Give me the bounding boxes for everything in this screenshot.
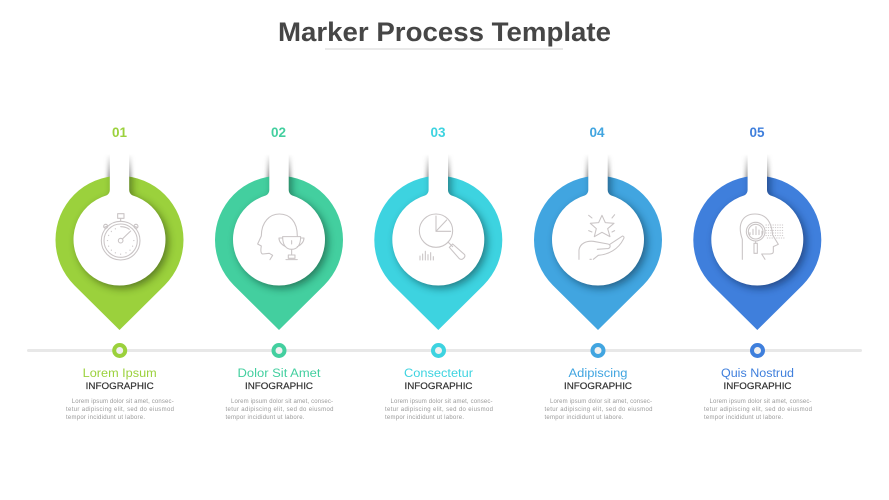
timeline dot 4 — [590, 343, 606, 358]
number 03: 03 — [430, 125, 446, 140]
step 1 — [55, 125, 183, 421]
timeline dot 1 — [112, 343, 127, 358]
description 1: Lorem ipsum dolor sit amet, consec- — [72, 399, 174, 405]
timeline dot 3 — [431, 343, 446, 358]
heading 4: Adipiscing — [568, 368, 628, 380]
marker pin 1 — [55, 150, 183, 330]
description 5: tetur adipiscing elit, sed do eiusmod — [704, 407, 812, 413]
subheading 5: INFOGRAPHIC — [724, 381, 792, 392]
marker pin 2 — [215, 150, 343, 330]
description 3: Lorem ipsum dolor sit amet, consec- — [390, 399, 492, 405]
description 3: tempor incididunt ut labore. — [385, 415, 464, 421]
timeline dot 2 — [272, 343, 286, 358]
description 5: Lorem ipsum dolor sit amet, consec- — [710, 399, 812, 405]
heading 3: Consectetur — [404, 368, 473, 380]
subheading 1: INFOGRAPHIC — [86, 381, 154, 392]
description 4: tetur adipiscing elit, sed do eiusmod — [544, 407, 652, 413]
marker pin 4 — [534, 150, 662, 330]
title: Marker Process Template — [278, 17, 611, 47]
description 2: tempor incididunt ut labore. — [226, 415, 305, 421]
heading 2: Dolor Sit Amet — [238, 368, 321, 380]
number 05: 05 — [749, 125, 765, 140]
number 04: 04 — [589, 125, 605, 140]
icon: stopwatch — [101, 214, 140, 260]
step 2 — [215, 125, 343, 421]
description 1: tempor incididunt ut labore. — [66, 415, 145, 421]
icon: head with trophy — [258, 214, 304, 260]
number 02: 02 — [271, 125, 286, 140]
description 3: tetur adipiscing elit, sed do eiusmod — [385, 407, 493, 413]
description 5: tempor incididunt ut labore. — [704, 415, 783, 421]
description 1: tetur adipiscing elit, sed do eiusmod — [66, 407, 174, 413]
description 4: Lorem ipsum dolor sit amet, consec- — [550, 399, 652, 405]
icon: head with magnifier and data — [740, 214, 784, 259]
marker pin 5 — [693, 150, 821, 330]
description 2: tetur adipiscing elit, sed do eiusmod — [226, 407, 334, 413]
icon: star in hand — [579, 215, 624, 259]
marker pin 3 — [374, 150, 502, 330]
subheading 4: INFOGRAPHIC — [564, 381, 632, 392]
icon: pie chart magnifier — [419, 214, 465, 260]
title underline — [325, 48, 563, 50]
step 3 — [374, 125, 502, 421]
subheading 2: INFOGRAPHIC — [245, 381, 313, 392]
timeline line — [27, 349, 862, 352]
description 4: tempor incididunt ut labore. — [544, 415, 624, 421]
timeline dot 5 — [750, 343, 765, 358]
step 5 — [693, 125, 821, 421]
heading 1: Lorem Ipsum — [83, 368, 157, 380]
number 01: 01 — [112, 125, 127, 140]
heading 5: Quis Nostrud — [721, 368, 794, 380]
step 4 — [534, 125, 662, 421]
subheading 3: INFOGRAPHIC — [404, 381, 473, 392]
description 2: Lorem ipsum dolor sit amet, consec- — [231, 399, 333, 405]
